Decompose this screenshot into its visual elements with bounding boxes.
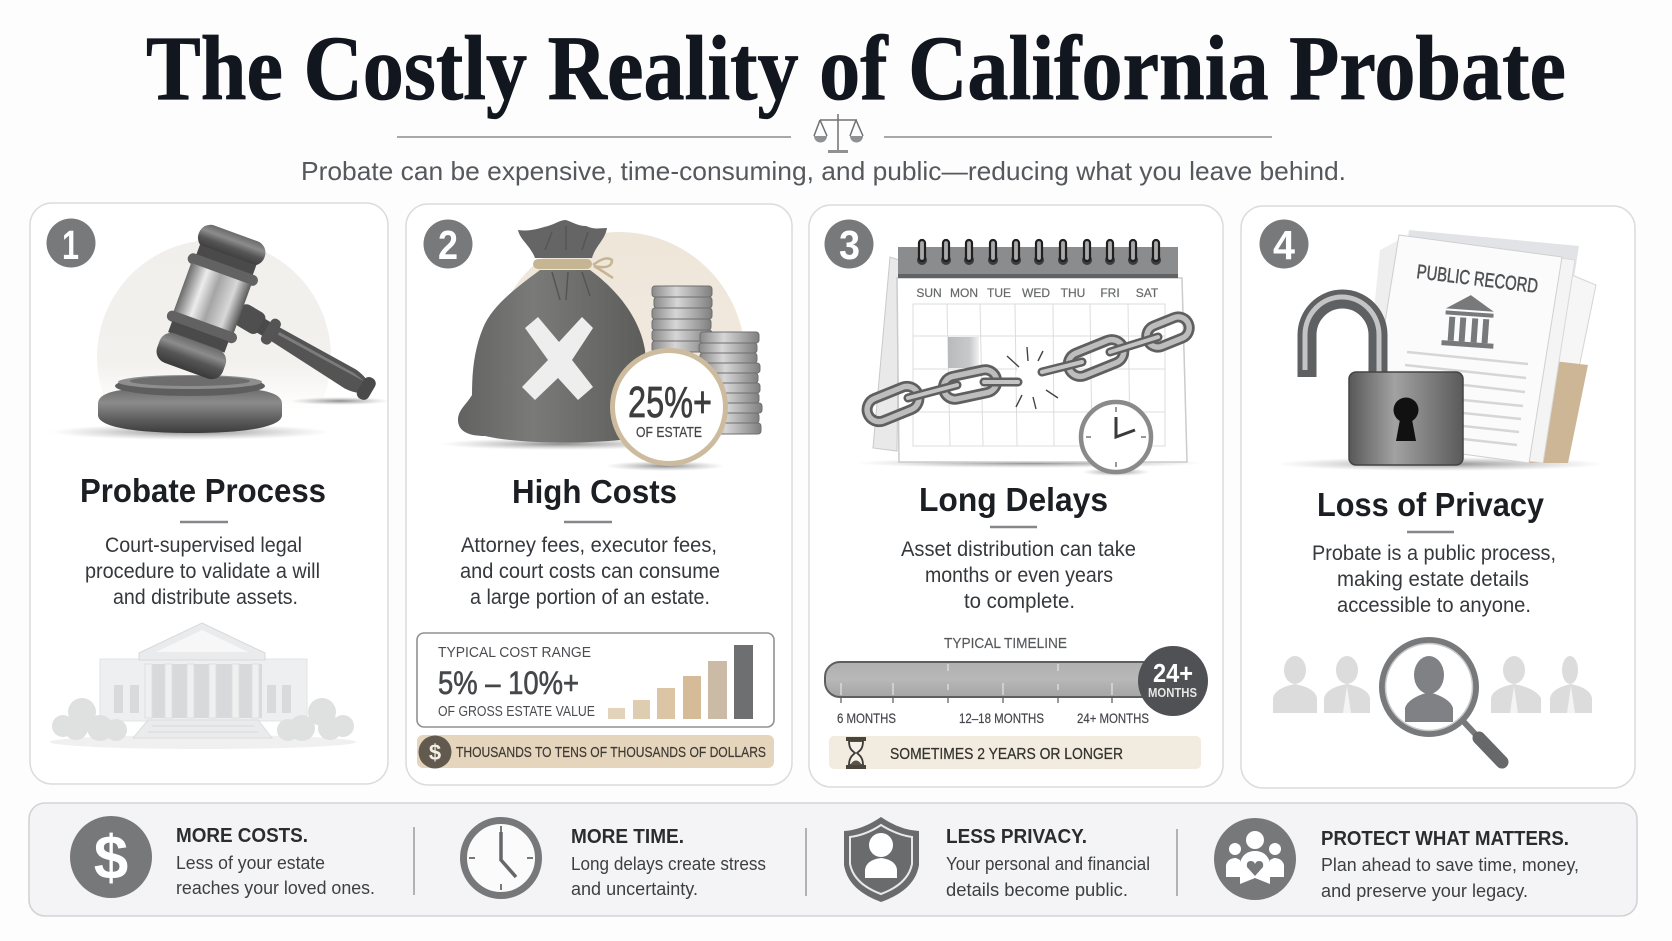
bar chart [608, 645, 753, 719]
number badge 3 [824, 220, 874, 268]
number badge 2: 2 [438, 222, 458, 268]
description: making estate details [1337, 568, 1529, 591]
icon: shield [844, 817, 919, 902]
illustration: courthouse [50, 623, 356, 749]
icon: public record and open padlock: PUBLIC RECORD [1415, 261, 1539, 298]
item: protect what matters [1214, 818, 1579, 901]
number badge 2 [424, 220, 472, 268]
icon: clock [464, 820, 538, 896]
icon: calendar, broken chain and clock: TUE [987, 286, 1011, 300]
callout: typical cost range [417, 633, 774, 727]
icon: hourglass [846, 737, 866, 769]
icon: calendar, broken chain and clock [855, 240, 1205, 476]
callout: typical cost range: TYPICAL COST RANGE [438, 644, 591, 661]
description: accessible to anyone. [1337, 594, 1531, 617]
heading: Loss of Privacy [1317, 486, 1545, 523]
title rule with scales icon [397, 114, 1272, 153]
callout: thousands of dollars: THOUSANDS TO TENS OF THOUSANDS OF DOLLARS [456, 744, 766, 761]
item: less privacy: Your personal and financial [946, 854, 1150, 874]
item: less privacy: details become public. [946, 880, 1128, 900]
icon: family with heart [1214, 818, 1296, 900]
description [901, 538, 1136, 613]
description: a large portion of an estate. [470, 586, 710, 609]
item: less privacy: LESS PRIVACY. [946, 826, 1087, 848]
item: more time: and uncertainty. [571, 879, 698, 899]
panel: high costs [406, 204, 792, 785]
heading rule [1407, 531, 1454, 533]
panel: long delays [809, 205, 1223, 787]
icon: calendar, broken chain and clock: FRI [1100, 286, 1120, 300]
description [1312, 542, 1556, 617]
icon: public record and open padlock [1275, 230, 1605, 471]
callout: thousands of dollars: $ [429, 740, 441, 765]
description: Court-supervised legal [105, 534, 302, 557]
panel: loss of privacy [1241, 206, 1635, 788]
illustration: people and magnifying glass [1273, 640, 1592, 762]
number badge 4: 4 [1273, 222, 1295, 268]
description [460, 534, 720, 609]
icon: money bag with coins and 25 percent badge [440, 220, 762, 484]
item: more costs: Less of your estate [176, 853, 325, 873]
item: more time [464, 820, 766, 899]
icon: calendar, broken chain and clock: SUN [916, 286, 942, 300]
item: more costs: MORE COSTS. [176, 825, 308, 847]
heading: Probate Process [80, 472, 326, 509]
timeline chart: 24+ [1153, 658, 1193, 688]
item: more costs: reaches your loved ones. [176, 878, 375, 898]
callout: sometimes 2 years or longer [829, 736, 1201, 769]
heading rule [990, 526, 1037, 528]
heading rule [564, 521, 612, 523]
timeline chart: 24+ MONTHS [1077, 710, 1149, 726]
description: months or even years [925, 564, 1113, 587]
summary strip [29, 803, 1637, 916]
callout: thousands of dollars [417, 735, 774, 768]
icon: money bag with coins and 25 percent badge: 25%+ [628, 378, 712, 427]
number badge 1: 1 [62, 222, 79, 268]
subtitle: Probate can be expensive, time-consuming, and public—reducing what you leave behind. [301, 156, 1346, 186]
timeline chart: 12–18 MONTHS [959, 710, 1044, 726]
icon: gavel [50, 221, 390, 474]
icon: money bag with coins and 25 percent badge: OF ESTATE [636, 425, 702, 441]
timeline chart [825, 636, 1208, 726]
callout: sometimes 2 years or longer: SOMETIMES 2 YEARS OR LONGER [890, 746, 1123, 763]
item: protect what matters: and preserve your legacy. [1321, 881, 1528, 901]
item: protect what matters: Plan ahead to save time, money, [1321, 855, 1579, 875]
heading rule [180, 521, 228, 523]
timeline chart: MONTHS [1148, 685, 1197, 700]
number badge 3: 3 [839, 222, 860, 268]
icon: calendar, broken chain and clock: SAT [1136, 286, 1159, 300]
timeline chart: 6 MONTHS [837, 710, 896, 726]
item: more costs [70, 816, 375, 898]
timeline chart: TYPICAL TIMELINE [944, 636, 1067, 652]
description: and distribute assets. [113, 586, 298, 609]
callout: typical cost range: OF GROSS ESTATE VALUE [438, 704, 595, 720]
icon: dollar [70, 816, 152, 898]
icon: calendar, broken chain and clock: WED [1022, 286, 1050, 300]
icon: calendar, broken chain and clock: MON [950, 286, 978, 300]
item: less privacy [844, 817, 1150, 902]
description: Probate is a public process, [1312, 542, 1556, 565]
description: and court costs can consume [460, 560, 720, 583]
description: Attorney fees, executor fees, [461, 534, 717, 557]
description: procedure to validate a will [85, 560, 320, 583]
callout: typical cost range: 5% – 10%+ [438, 665, 579, 701]
panel: probate process [30, 203, 390, 784]
item: more time: Long delays create stress [571, 854, 766, 874]
description [85, 534, 320, 609]
icon: calendar, broken chain and clock: THU [1061, 286, 1085, 300]
heading: Long Delays [919, 481, 1108, 518]
item: more time: MORE TIME. [571, 826, 684, 848]
heading: High Costs [512, 473, 677, 510]
number badge 4 [1260, 220, 1308, 268]
number badge 1 [46, 218, 96, 268]
description: Asset distribution can take [901, 538, 1136, 561]
icon: dollar: $ [94, 824, 128, 893]
item: protect what matters: PROTECT WHAT MATTERS. [1321, 828, 1569, 850]
description: to complete. [964, 590, 1075, 613]
